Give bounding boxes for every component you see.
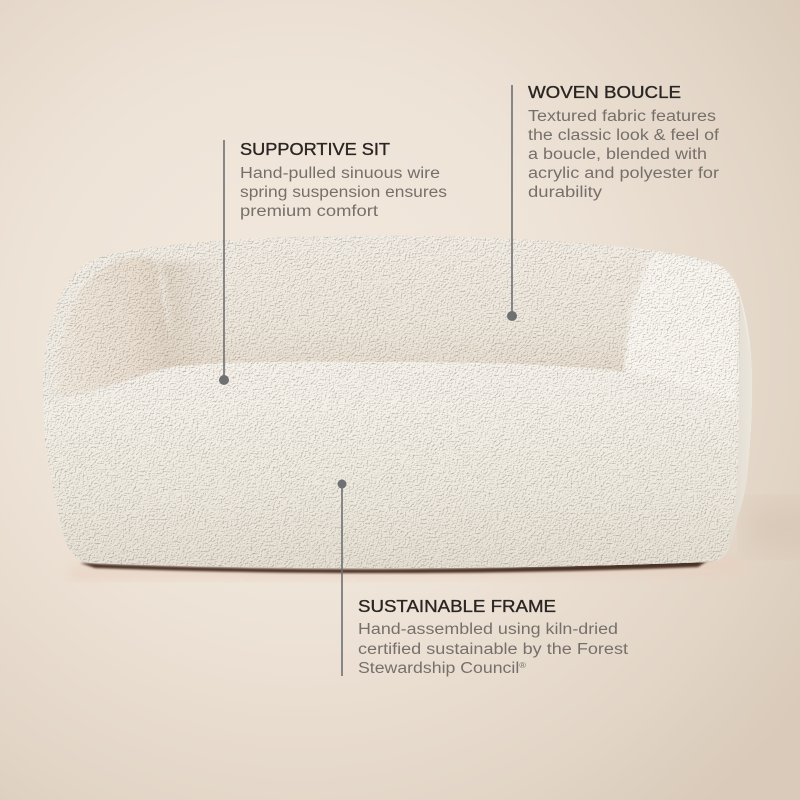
body text: supportive sit: Hand-pulled sinuous wire xyxy=(240,165,440,182)
right outer side xyxy=(733,296,751,518)
right arm panel xyxy=(625,253,738,403)
body text: woven boucle: the classic look & feel of xyxy=(528,127,720,144)
body text: sustainable frame xyxy=(358,621,629,677)
leader line and dot: sustainable frame xyxy=(338,480,346,676)
body text: sustainable frame: certified sustainable by the Forest xyxy=(358,641,629,658)
body text: woven boucle: acrylic and polyester for xyxy=(528,165,719,182)
body text: woven boucle: a boucle, blended with xyxy=(528,146,707,163)
upholstery panels xyxy=(58,255,750,568)
heading: supportive sit: SUPPORTIVE SIT xyxy=(240,139,390,159)
callout: woven boucle xyxy=(507,82,720,321)
backrest xyxy=(168,308,630,372)
sofa base shadow xyxy=(70,556,750,580)
body text: woven boucle xyxy=(528,108,720,201)
sofa xyxy=(40,230,760,580)
body text: supportive sit xyxy=(240,165,447,220)
callout: sustainable frame xyxy=(338,480,629,677)
leader line and dot: woven boucle xyxy=(507,85,517,321)
heading: sustainable frame: SUSTAINABLE FRAME xyxy=(358,596,556,616)
heading: woven boucle: WOVEN BOUCLE xyxy=(528,82,681,102)
left arm inner shade xyxy=(57,257,172,394)
leader line and dot: supportive sit xyxy=(219,140,229,385)
body text: woven boucle: Textured fabric features xyxy=(528,108,716,125)
callout: supportive sit xyxy=(219,139,447,385)
body text: sustainable frame: ® xyxy=(519,661,526,670)
body text: sustainable frame: Hand-assembled using kiln-dried xyxy=(358,621,618,638)
sofa body silhouette xyxy=(43,236,752,568)
seat cushion xyxy=(112,362,623,387)
crease beside left arm xyxy=(160,260,208,366)
front panel xyxy=(58,508,734,568)
body text: woven boucle: durability xyxy=(528,184,602,201)
boucle fabric texture xyxy=(40,230,752,575)
body text: supportive sit: premium comfort xyxy=(240,203,379,220)
body text: supportive sit: spring suspension ensures xyxy=(240,184,447,201)
body text: sustainable frame: Stewardship Council xyxy=(358,660,499,677)
